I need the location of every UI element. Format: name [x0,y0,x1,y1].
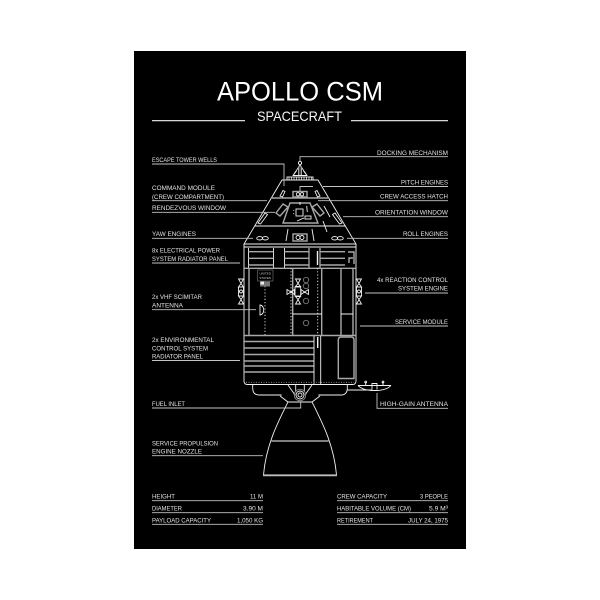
subtitle rules [152,120,448,122]
label: electrical power radiator panel: 8x ELECTRICAL POWER [152,248,220,255]
crew access hatch and windows [258,202,342,232]
spec: habitable volume: 5.9 M³ [429,506,449,513]
rcs quad right [356,279,362,304]
label: vhf scimitar antenna [152,294,256,310]
flag [260,282,270,286]
service module [244,244,356,384]
spec: crew capacity: CREW CAPACITY [337,494,387,501]
label: orientation window: ORIENTATION WINDOW [375,210,449,217]
label: reaction control system engine: SYSTEM ENGINE [398,286,448,293]
subtitle: SPACECRAFT [257,108,342,124]
label: service propulsion engine nozzle [152,440,263,456]
label: environmental control radiator panel: 2x ENVIRONMENTAL [152,337,214,344]
label: pitch engines: PITCH ENGINES [401,180,448,186]
spec: diameter [152,506,263,513]
spec: height [152,494,263,501]
label: reaction control system engine [365,277,448,293]
label: environmental control radiator panel: CONTROL SYSTEM [152,345,208,352]
label: fuel inlet [152,401,301,408]
high-gain antenna [347,381,391,390]
label: crew access hatch [318,194,448,201]
label: environmental control radiator panel: RADIATOR PANEL [152,354,203,361]
yaw and roll engines [257,229,343,241]
label: electrical power radiator panel: SYSTEM RADIATOR PANEL [152,256,228,263]
label: service propulsion engine nozzle: SERVICE PROPULSION [152,440,218,447]
vhf scimitar antenna [260,305,264,315]
label: fuel inlet: FUEL INLET [152,401,185,408]
spec: retirement: RETIREMENT [337,517,373,524]
spacecraft diagram [238,161,391,475]
label: docking mechanism [300,150,448,161]
label: docking mechanism: DOCKING MECHANISM [377,150,448,157]
pitch engines [280,190,320,197]
fuel tank window [338,337,354,378]
united states marking [258,270,273,286]
label: command module: COMMAND MODULE [152,185,215,192]
rcs quad left [238,279,244,304]
electrical power radiator panels [244,248,356,268]
service module bays [244,268,356,336]
label: high-gain antenna [377,393,448,408]
spec: crew capacity: 3 PEOPLE [420,494,448,501]
title block [152,76,448,124]
spec: diameter: DIAMETER [152,506,182,513]
left callouts [152,157,301,456]
right callouts [300,150,449,408]
label: escape tower wells: ESCAPE TOWER WELLS [152,157,217,164]
label: electrical power radiator panel [152,248,240,263]
spec: payload capacity: 1,050 KG [237,517,263,524]
label: command module: (CREW COMPARTMENT) [152,194,224,201]
label: high-gain antenna: HIGH-GAIN ANTENNA [380,401,448,408]
label: environmental control radiator panel [152,337,240,361]
label: orientation window [343,210,449,217]
label: reaction control system engine: 4x REACTION CONTROL [377,277,448,284]
spec: height: 11 M [250,494,263,501]
label: service module [360,319,448,326]
spec: habitable volume: HABITABLE VOLUME (CM) [337,506,411,513]
united states marking: STATES [259,276,271,280]
spec: payload capacity [152,517,263,524]
spec: diameter: 3.90 M [243,506,263,513]
spec: payload capacity: PAYLOAD CAPACITY [152,517,211,524]
label: vhf scimitar antenna: 2x VHF SCIMITAR [152,294,202,301]
label: yaw engines [152,231,253,238]
engine nozzle [264,402,336,475]
bay circles [303,277,309,326]
label: yaw engines: YAW ENGINES [152,231,196,238]
label: escape tower wells [152,157,284,186]
label: pitch engines [300,180,448,191]
label: rendezvous window: RENDEZVOUS WINDOW [152,205,227,212]
spec: retirement: JULY 24, 1975 [408,517,448,524]
label: crew access hatch: CREW ACCESS HATCH [380,194,448,201]
specs table right [337,494,449,524]
label: roll engines: ROLL ENGINES [403,231,448,238]
environmental control radiator [244,336,321,384]
docking mechanism [287,161,313,180]
reaction control engine cluster [287,279,308,304]
spec: height: HEIGHT [152,494,175,501]
command module [244,180,356,247]
label: command module [152,185,267,201]
title: APOLLO CSM [217,76,383,106]
main engine [253,385,347,475]
label: vhf scimitar antenna: ANTENNA [152,303,183,310]
label: roll engines [347,231,448,238]
spec: crew capacity [337,494,448,501]
label: rendezvous window [152,205,275,212]
label: service module: SERVICE MODULE [395,319,448,326]
spec: retirement [337,517,448,524]
base dotted seam [246,381,354,383]
specs table left [152,494,263,524]
label: service propulsion engine nozzle: ENGINE NOZZLE [152,449,202,456]
united states marking: UNITED [259,271,272,275]
